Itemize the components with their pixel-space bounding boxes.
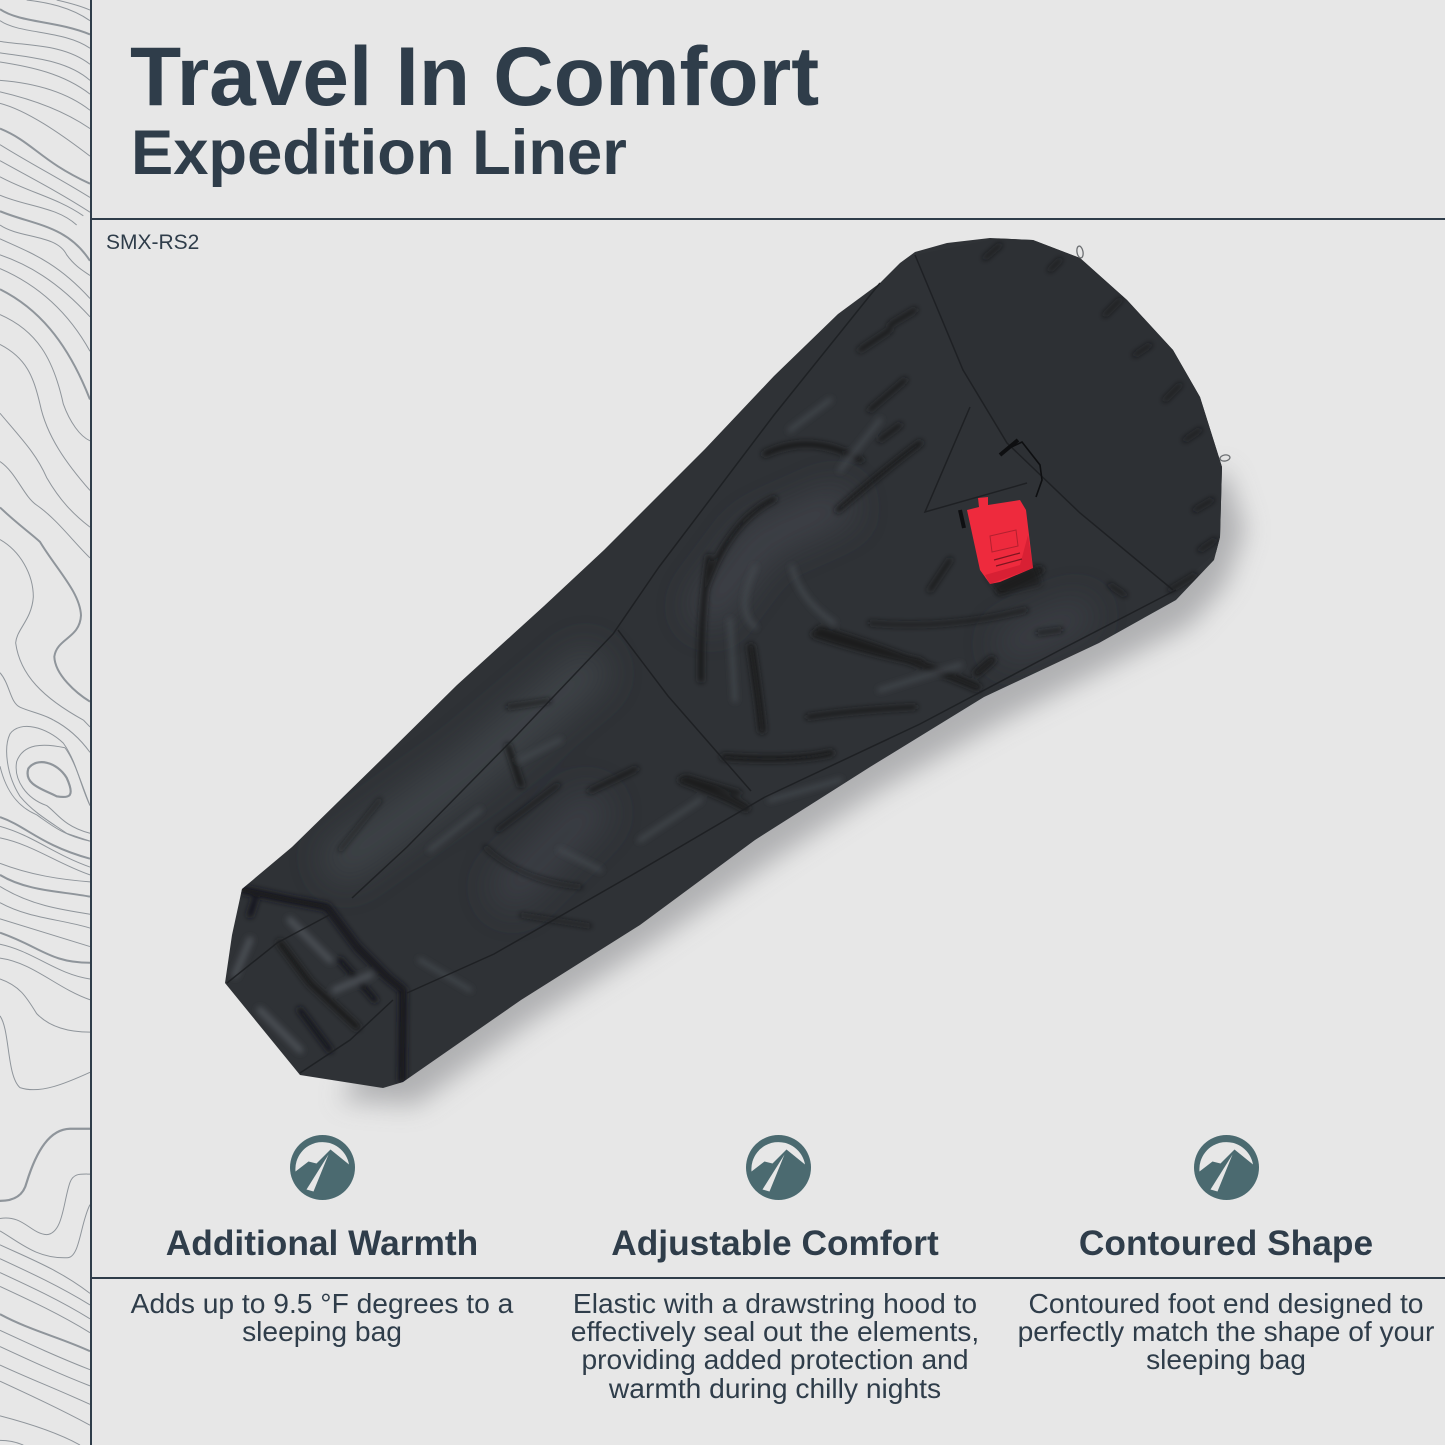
bag body bbox=[200, 220, 1240, 1100]
red stuff pouch bbox=[967, 497, 1042, 595]
fabric sheen bbox=[330, 500, 1090, 900]
description: warmth during chilly nights bbox=[609, 1372, 941, 1404]
feature: Contoured Shape bbox=[1018, 1135, 1434, 1375]
fabric folds bbox=[340, 245, 1215, 990]
description: effectively seal out the elements, bbox=[571, 1315, 979, 1347]
topographic contour sidebar bbox=[0, 0, 90, 1445]
icon: mountain badge bbox=[746, 1135, 811, 1200]
header divider line bbox=[91, 218, 1445, 220]
heading: Adjustable Comfort bbox=[611, 1224, 939, 1263]
description bbox=[1018, 1287, 1434, 1375]
heading: Contoured Shape bbox=[1079, 1224, 1373, 1263]
subtitle: Expedition Liner bbox=[131, 118, 627, 188]
seams bbox=[227, 255, 1176, 1073]
product code: SMX-RS2 bbox=[106, 231, 199, 254]
icon: mountain badge bbox=[1194, 1135, 1259, 1200]
description bbox=[130, 1287, 514, 1347]
feature: Adjustable Comfort bbox=[571, 1135, 979, 1404]
features divider line bbox=[91, 1277, 1445, 1279]
title: Travel In Comfort bbox=[130, 29, 819, 123]
cord loops bbox=[1076, 246, 1230, 462]
heading: Additional Warmth bbox=[166, 1224, 478, 1263]
description: perfectly match the shape of your bbox=[1018, 1315, 1434, 1347]
description: Adds up to 9.5 °F degrees to a bbox=[131, 1287, 513, 1319]
description bbox=[571, 1287, 979, 1404]
description: Contoured foot end designed to bbox=[1029, 1287, 1423, 1319]
product photo: sleeping bag liner bbox=[225, 238, 1254, 1116]
description: Elastic with a drawstring hood to bbox=[573, 1287, 977, 1319]
description: sleeping bag bbox=[242, 1315, 402, 1347]
hood panel bbox=[998, 238, 1222, 552]
description: providing added protection and bbox=[581, 1343, 969, 1375]
bag shadow bbox=[340, 470, 1245, 1105]
foot end bbox=[235, 890, 403, 1080]
feature: Additional Warmth bbox=[130, 1135, 514, 1347]
description: sleeping bag bbox=[1146, 1343, 1306, 1375]
drawcord and toggle bbox=[960, 440, 1042, 528]
icon: mountain badge bbox=[290, 1135, 355, 1200]
sidebar divider line bbox=[90, 0, 92, 1445]
